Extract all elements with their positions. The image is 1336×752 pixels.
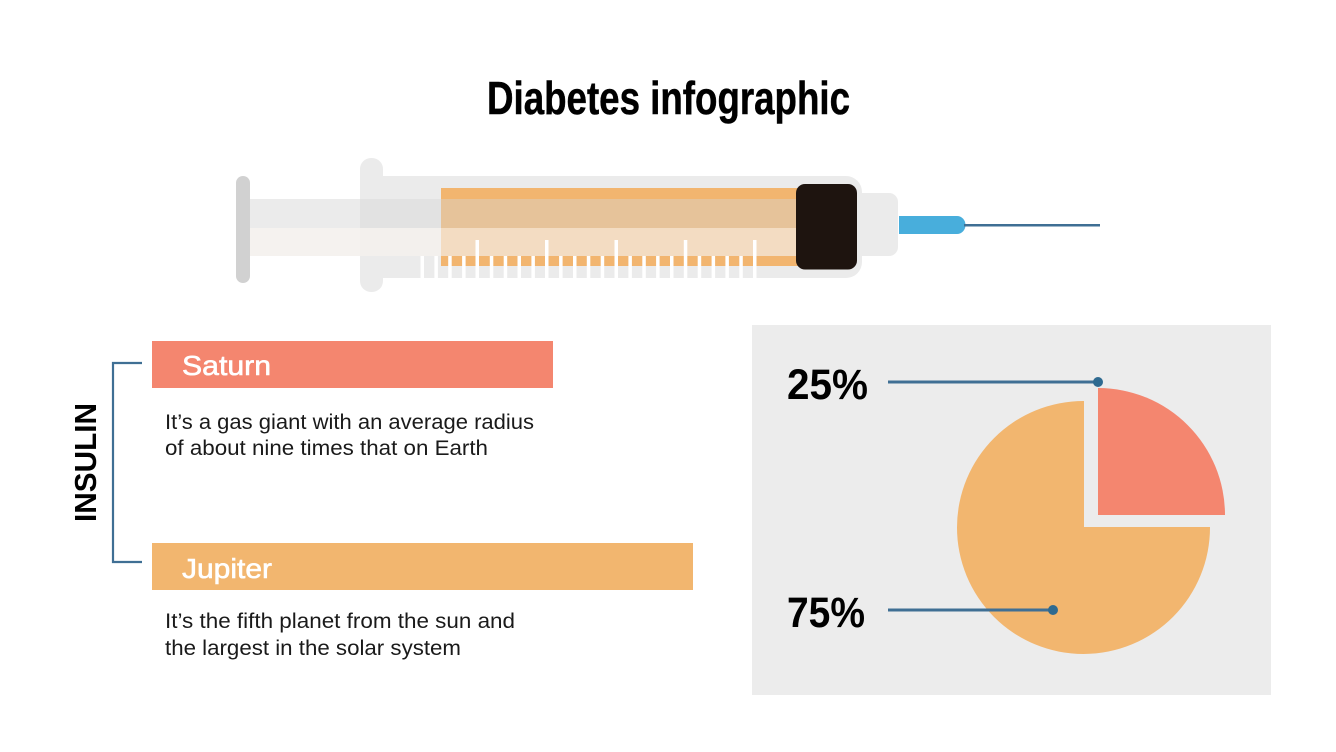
panel: pie chart (752, 325, 1271, 695)
Jupiter heading bar (152, 543, 693, 590)
panel: Jupiter (152, 543, 693, 660)
callout 75% (787, 589, 1058, 637)
measurement ticks (420, 240, 756, 278)
plunger rod (250, 199, 441, 256)
rubber stopper (796, 184, 857, 270)
pie slice 25% (1098, 388, 1225, 515)
Saturn description: of about nine times that on Earth (165, 436, 488, 460)
callout 25% (787, 361, 1103, 409)
insulin bracket (113, 363, 142, 562)
Jupiter heading: Jupiter (182, 553, 272, 584)
syringe illustration (236, 158, 1100, 292)
syringe tip (862, 193, 898, 256)
panel: Saturn (152, 341, 553, 460)
callout 25%: 25% (787, 361, 868, 409)
panel background (752, 325, 1271, 695)
syringe barrel (383, 176, 862, 278)
title: Diabetes infographic (487, 72, 850, 124)
insulin vertical label: INSULIN (68, 403, 103, 522)
plunger head (236, 176, 250, 283)
finger flange (360, 158, 383, 292)
needle (964, 224, 1100, 226)
Jupiter description: the largest in the solar system (165, 636, 461, 660)
callout 75%: 75% (787, 589, 865, 637)
pie slice 75% (957, 401, 1210, 654)
Jupiter description: It’s the fifth planet from the sun and (165, 609, 515, 633)
needle hub (899, 216, 966, 234)
Saturn description: It’s a gas giant with an average radius (165, 410, 534, 434)
insulin liquid (441, 188, 801, 266)
Saturn heading bar (152, 341, 553, 388)
Saturn heading: Saturn (182, 350, 271, 381)
rod inside barrel (383, 199, 441, 256)
